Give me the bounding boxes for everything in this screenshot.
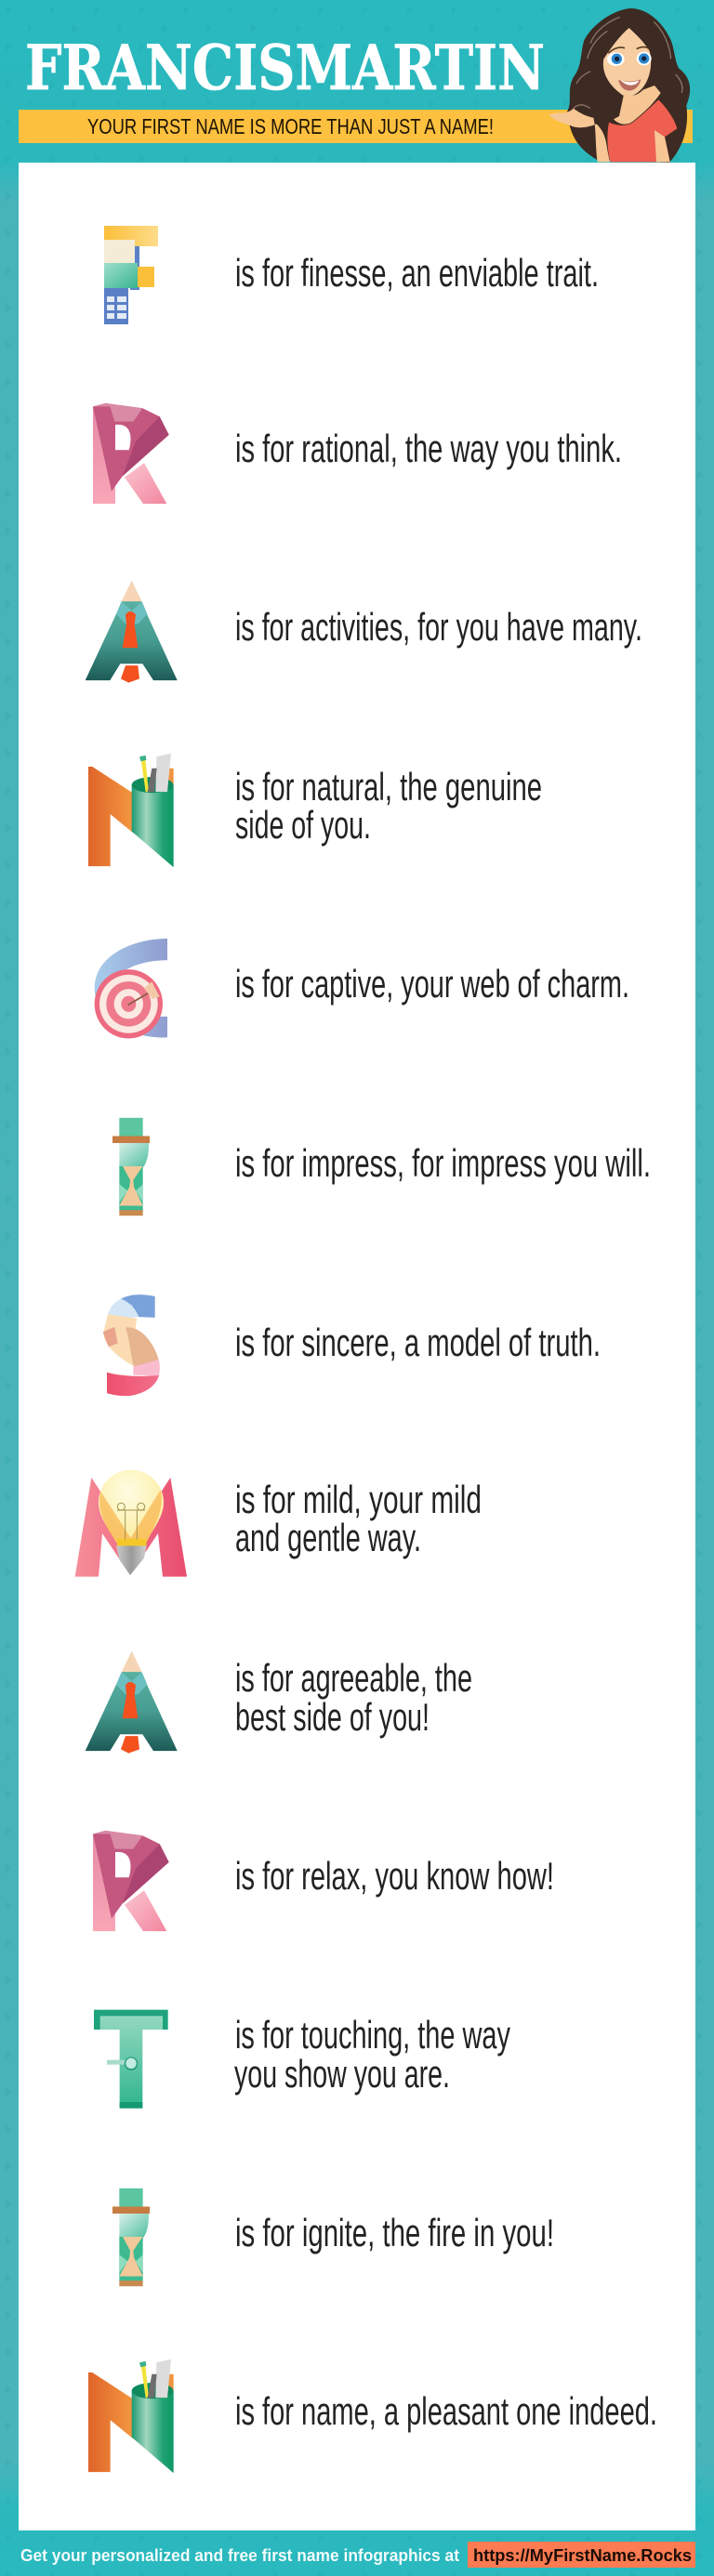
footer url badge: https://MyFirstName.Rocks	[473, 2546, 692, 2565]
footer text: Get your personalized and free first name infographics at	[20, 2546, 459, 2565]
row: F	[104, 226, 599, 324]
text: N: is for natural, the genuine	[235, 765, 542, 808]
row: S	[103, 1295, 601, 1396]
icon: letter A with tie	[86, 1651, 178, 1754]
row: T	[94, 2010, 510, 2109]
icon: letter N pencil cup	[88, 2359, 174, 2473]
icon: letter T door	[94, 2010, 168, 2109]
row: N	[88, 754, 542, 867]
icon: letter A with tie	[86, 581, 178, 683]
tagline banner: YOUR FIRST NAME IS MORE THAN JUST A NAME!	[87, 114, 494, 138]
row: C	[95, 939, 629, 1038]
row: R	[93, 403, 622, 504]
icon: cartoon woman	[549, 8, 690, 163]
icon: letter M light bulb	[75, 1470, 187, 1577]
icon: letter F	[104, 226, 158, 324]
text: R (relax): is for relax, you know how!	[235, 1854, 554, 1898]
text: T	[234, 2013, 510, 2096]
row: I	[112, 1118, 651, 1216]
text: M: is for mild, your mild	[235, 1478, 482, 1521]
row: N (name)	[88, 2359, 657, 2473]
row: A	[86, 581, 642, 683]
icon: letter N pencil cup	[88, 754, 174, 867]
icon: letter I hourglass	[112, 1118, 150, 1216]
tagline banner	[19, 110, 693, 143]
row: M	[75, 1470, 482, 1577]
text: N: side of you.	[235, 803, 371, 847]
footer	[20, 2542, 695, 2568]
text: A (agreeable): is for agreeable, the	[235, 1656, 472, 1700]
row: A (agreeable)	[86, 1651, 472, 1754]
text: I (ignite): is for ignite, the fire in you!	[235, 2211, 554, 2254]
row: I (ignite)	[112, 2188, 554, 2286]
text: A (agreeable)	[235, 1656, 472, 1739]
icon: letter R gem	[93, 403, 169, 504]
text: N	[235, 765, 542, 847]
footer url badge	[468, 2542, 695, 2568]
text: M: and gentle way.	[235, 1516, 421, 1559]
text: M	[235, 1478, 482, 1559]
row: R (relax)	[93, 1831, 554, 1931]
text: A (agreeable): best side of you!	[235, 1695, 430, 1739]
text: T: you show you are.	[234, 2052, 450, 2096]
icon: letter R gem	[93, 1831, 169, 1931]
text: T: is for touching, the way	[235, 2013, 510, 2057]
icon: letter C target	[95, 939, 167, 1038]
icon: letter I hourglass	[112, 2188, 150, 2286]
title: FRANCISMARTIN	[25, 32, 545, 104]
icon: letter S handshake	[103, 1295, 160, 1396]
